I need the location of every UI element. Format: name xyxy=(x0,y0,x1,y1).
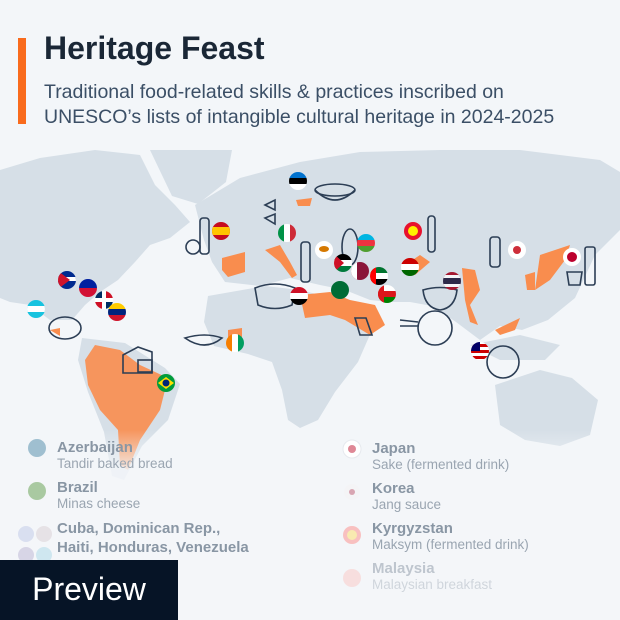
preview badge: Preview xyxy=(32,571,146,607)
legend left xyxy=(57,439,249,556)
legend right: Malaysian breakfast xyxy=(372,577,492,592)
legend right: Maksym (fermented drink) xyxy=(372,537,529,552)
legend left: Tandir baked bread xyxy=(57,456,173,471)
legend right: Jang sauce xyxy=(372,497,441,512)
legend left: Brazil xyxy=(57,479,98,496)
preview badge xyxy=(0,560,178,620)
subtitle: UNESCO’s lists of intangible cultural heritage in 2024-2025 xyxy=(44,106,554,128)
legend right: Malaysia xyxy=(372,560,435,577)
subtitle: Traditional food-related skills & practices inscribed on xyxy=(44,81,504,103)
title: Heritage Feast xyxy=(44,30,265,66)
legend right: Korea xyxy=(372,480,415,497)
icons xyxy=(49,184,595,378)
flags xyxy=(27,172,581,392)
legend right xyxy=(372,440,529,592)
legend left: Azerbaijan xyxy=(57,439,133,456)
legend right: Japan xyxy=(372,440,415,457)
legend left: Cuba, Dominican Rep., xyxy=(57,520,220,537)
accent bar xyxy=(18,38,26,124)
legend left: Minas cheese xyxy=(57,496,140,511)
map xyxy=(0,150,620,470)
subtitle xyxy=(44,81,554,128)
legend icons xyxy=(18,439,362,587)
legend right: Kyrgyzstan xyxy=(372,520,453,537)
legend right: Sake (fermented drink) xyxy=(372,457,509,472)
map fade under legend xyxy=(0,430,620,470)
legend left: Haiti, Honduras, Venezuela xyxy=(57,539,249,556)
